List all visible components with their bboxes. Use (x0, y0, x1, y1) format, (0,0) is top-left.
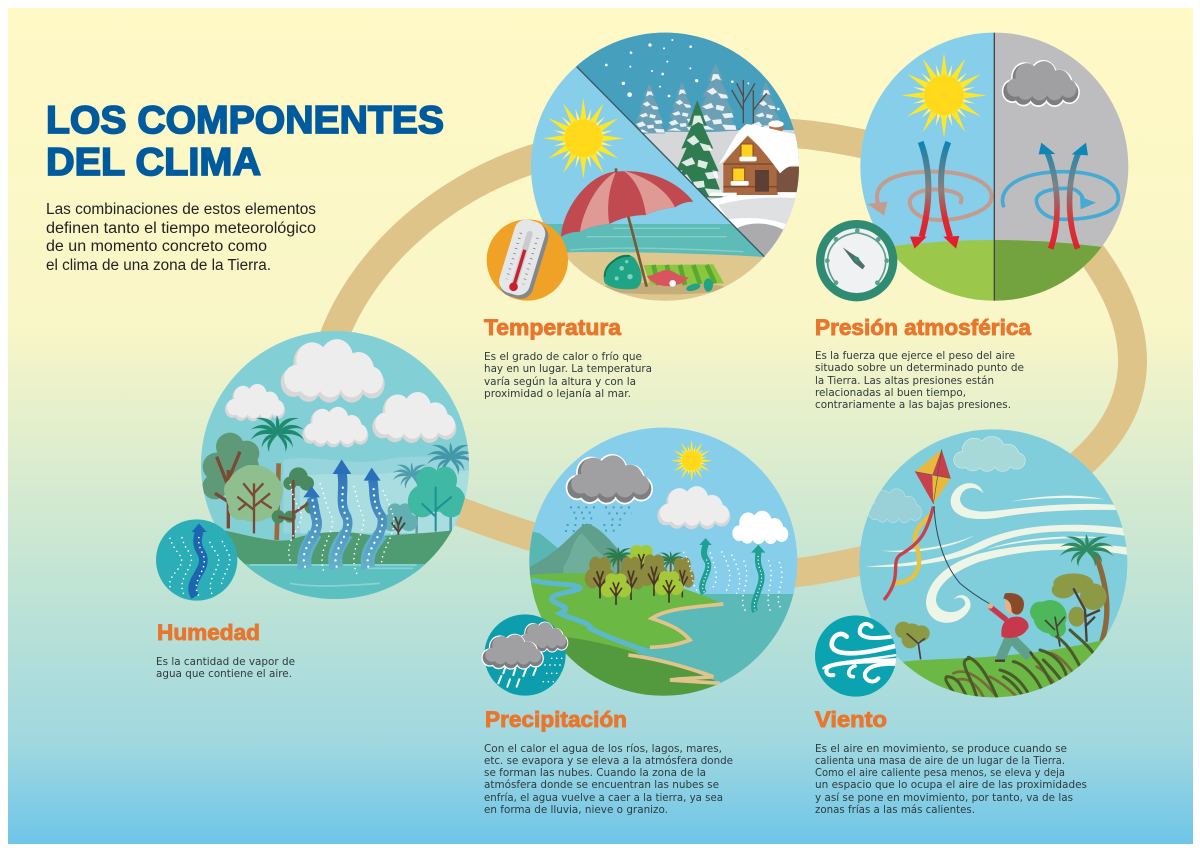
text: humedad: Es la cantidad de vapor de (156, 655, 295, 668)
illustration: boy flying a kite (815, 429, 1128, 698)
intro text: de un momento concreto como (46, 238, 267, 255)
text: viento: calienta una masa de aire de un lugar de la Tierra. (815, 754, 1065, 767)
text: temperatura: Es el grado de calor o frío que (484, 350, 642, 363)
icon: barometer (816, 220, 897, 301)
panel: precipitacion (482, 428, 798, 696)
illustration: water cycle landscape (482, 428, 798, 696)
text: viento: un espacio que lo ocupa el aire de las proximidades (815, 778, 1087, 791)
panel: temperatura (156, 20, 1161, 816)
text: precipitacion (484, 742, 733, 816)
text: humedad (156, 655, 295, 680)
text: viento: Como el aire caliente pesa menos, se eleva y deja (815, 766, 1065, 779)
heading: precipitacion: Precipitación (485, 707, 627, 732)
intro text: Las combinaciones de estos elementos (46, 201, 316, 218)
icon: rain clouds (483, 614, 567, 696)
text: temperatura: proximidad o lejanía al mar. (484, 387, 631, 400)
text: viento: y así se pone en movimiento, por tanto, va de las (815, 791, 1073, 804)
text: precipitacion: atmósfera donde se encuentran las nubes se (484, 778, 719, 791)
text: temperatura: hay en un lugar. La temperatura (484, 362, 652, 375)
text: precipitacion: en forma de lluvia, nieve o granizo. (484, 803, 668, 816)
text: viento: zonas frías a las más calientes. (815, 803, 975, 816)
title (46, 99, 444, 184)
intro text: el clima de una zona de la Tierra. (46, 257, 271, 274)
text: presion atmosferica (815, 349, 1024, 411)
illustration: beach and snowy cabin (486, 32, 799, 301)
heading: viento: Viento (815, 707, 887, 732)
heading: presion atmosferica: Presión atmosférica (815, 315, 1032, 340)
text: temperatura: varía según la altura y con la (484, 375, 636, 388)
text: precipitacion: Con el calor el agua de los ríos, lagos, mares, (484, 742, 722, 755)
text: presion atmosferica: la Tierra. Las altas presiones están (815, 374, 994, 387)
panel: viento (815, 429, 1128, 698)
ring connecting the components (331, 132, 1133, 575)
text: viento (815, 742, 1087, 816)
text: presion atmosferica: contrariamente a las bajas presiones. (815, 398, 1011, 411)
text: precipitacion: enfría, el agua vuelve a caer a la tierra, ya sea (484, 791, 723, 804)
text: humedad: agua que contiene el aire. (156, 667, 292, 680)
text: presion atmosferica: Es la fuerza que ejerce el peso del aire (815, 349, 1015, 362)
title: LOS COMPONENTES (46, 99, 444, 142)
text: precipitacion: etc. se evapora y se eleva a la atmósfera donde (484, 754, 733, 767)
heading: humedad: Humedad (157, 620, 260, 645)
text: presion atmosferica: situado sobre un determinado punto de (815, 361, 1024, 374)
heading: temperatura: Temperatura (484, 315, 622, 340)
text: presion atmosferica: relacionadas al buen tiempo, (815, 386, 966, 399)
intro text: definen tanto el tiempo meteorológico (46, 220, 316, 237)
text: precipitacion: se forman las nubes. Cuando la zona de la (484, 766, 706, 779)
title: DEL CLIMA (46, 141, 261, 184)
illustration: forest and evaporation (156, 331, 469, 601)
panel: presion atmosferica (816, 32, 1128, 302)
text: temperatura (484, 350, 652, 400)
text: viento: Es el aire en movimiento, se produce cuando se (815, 742, 1067, 755)
panel: humedad (156, 331, 469, 601)
illustration: high and low pressure (816, 32, 1128, 302)
icon: humidity (156, 519, 237, 601)
intro text (46, 201, 316, 274)
icon: thermometer (487, 216, 568, 302)
icon: wind (815, 615, 898, 697)
